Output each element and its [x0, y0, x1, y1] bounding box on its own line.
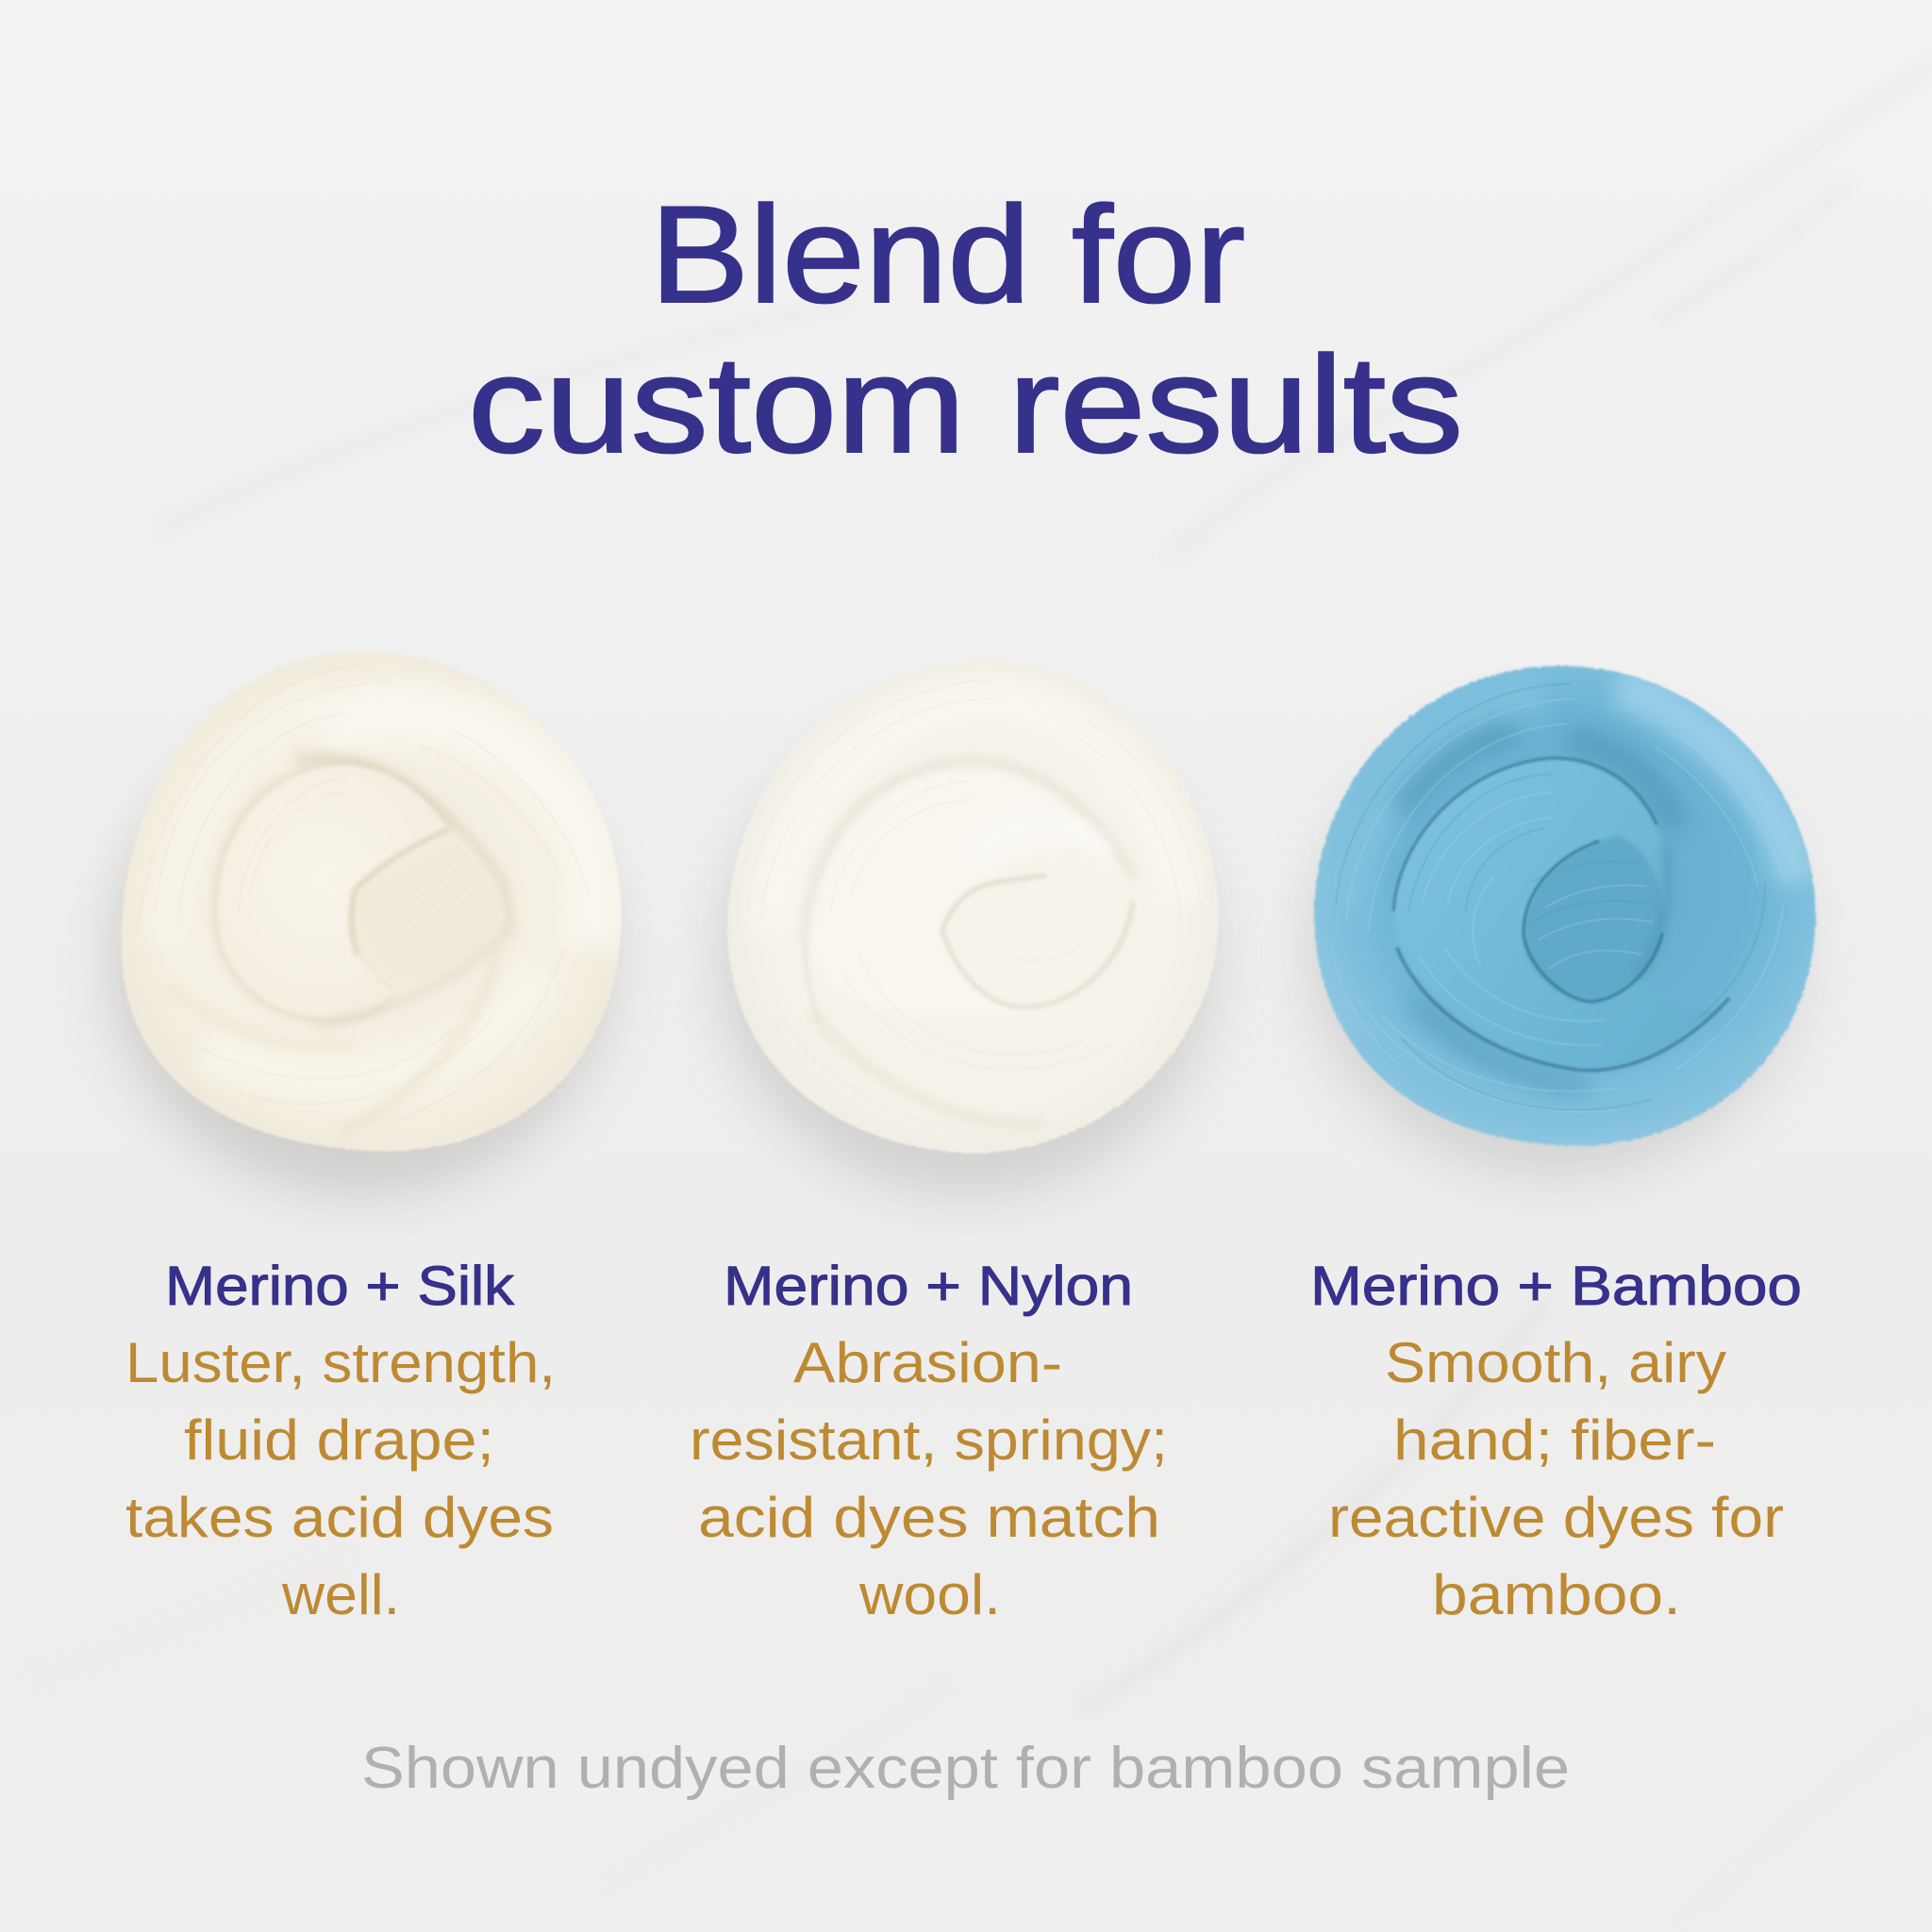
description: silk blend: Luster, strength,: [125, 1331, 556, 1394]
description: nylon blend: resistant, springy;: [690, 1408, 1168, 1472]
wool sample: cream merino silk: [108, 652, 622, 1196]
wool sample: blue merino bamboo: [1307, 666, 1816, 1178]
description: silk blend: fluid drape;: [184, 1408, 494, 1472]
description: bamboo blend: Smooth, airy: [1385, 1331, 1726, 1394]
description: bamboo blend: bamboo.: [1432, 1563, 1681, 1626]
description: nylon blend: acid dyes match: [698, 1486, 1160, 1549]
title: custom results: [468, 327, 1463, 481]
description: bamboo blend: hand; fiber-: [1393, 1408, 1716, 1472]
wool sample: white merino nylon: [718, 660, 1218, 1196]
description: silk blend: well.: [281, 1563, 400, 1626]
panel: merino + nylon: [690, 660, 1218, 1626]
panel: merino + silk: [108, 652, 622, 1626]
heading: Merino + Silk: Merino + Silk: [165, 1256, 515, 1317]
description: bamboo blend: [1328, 1331, 1784, 1626]
description: silk blend: [125, 1331, 556, 1626]
panel: merino + bamboo: [1307, 666, 1816, 1626]
title: Blend for: [650, 177, 1245, 331]
description: nylon blend: Abrasion-: [793, 1331, 1062, 1394]
title: [468, 177, 1463, 481]
footnote: Shown undyed except for bamboo sample: [361, 1736, 1570, 1801]
description: bamboo blend: reactive dyes for: [1328, 1486, 1784, 1549]
description: nylon blend: wool.: [858, 1563, 1001, 1626]
heading: Merino + Bamboo: Merino + Bamboo: [1310, 1256, 1802, 1317]
description: nylon blend: [690, 1331, 1168, 1626]
description: silk blend: takes acid dyes: [125, 1486, 554, 1549]
heading: Merino + Nylon: Merino + Nylon: [724, 1256, 1133, 1317]
